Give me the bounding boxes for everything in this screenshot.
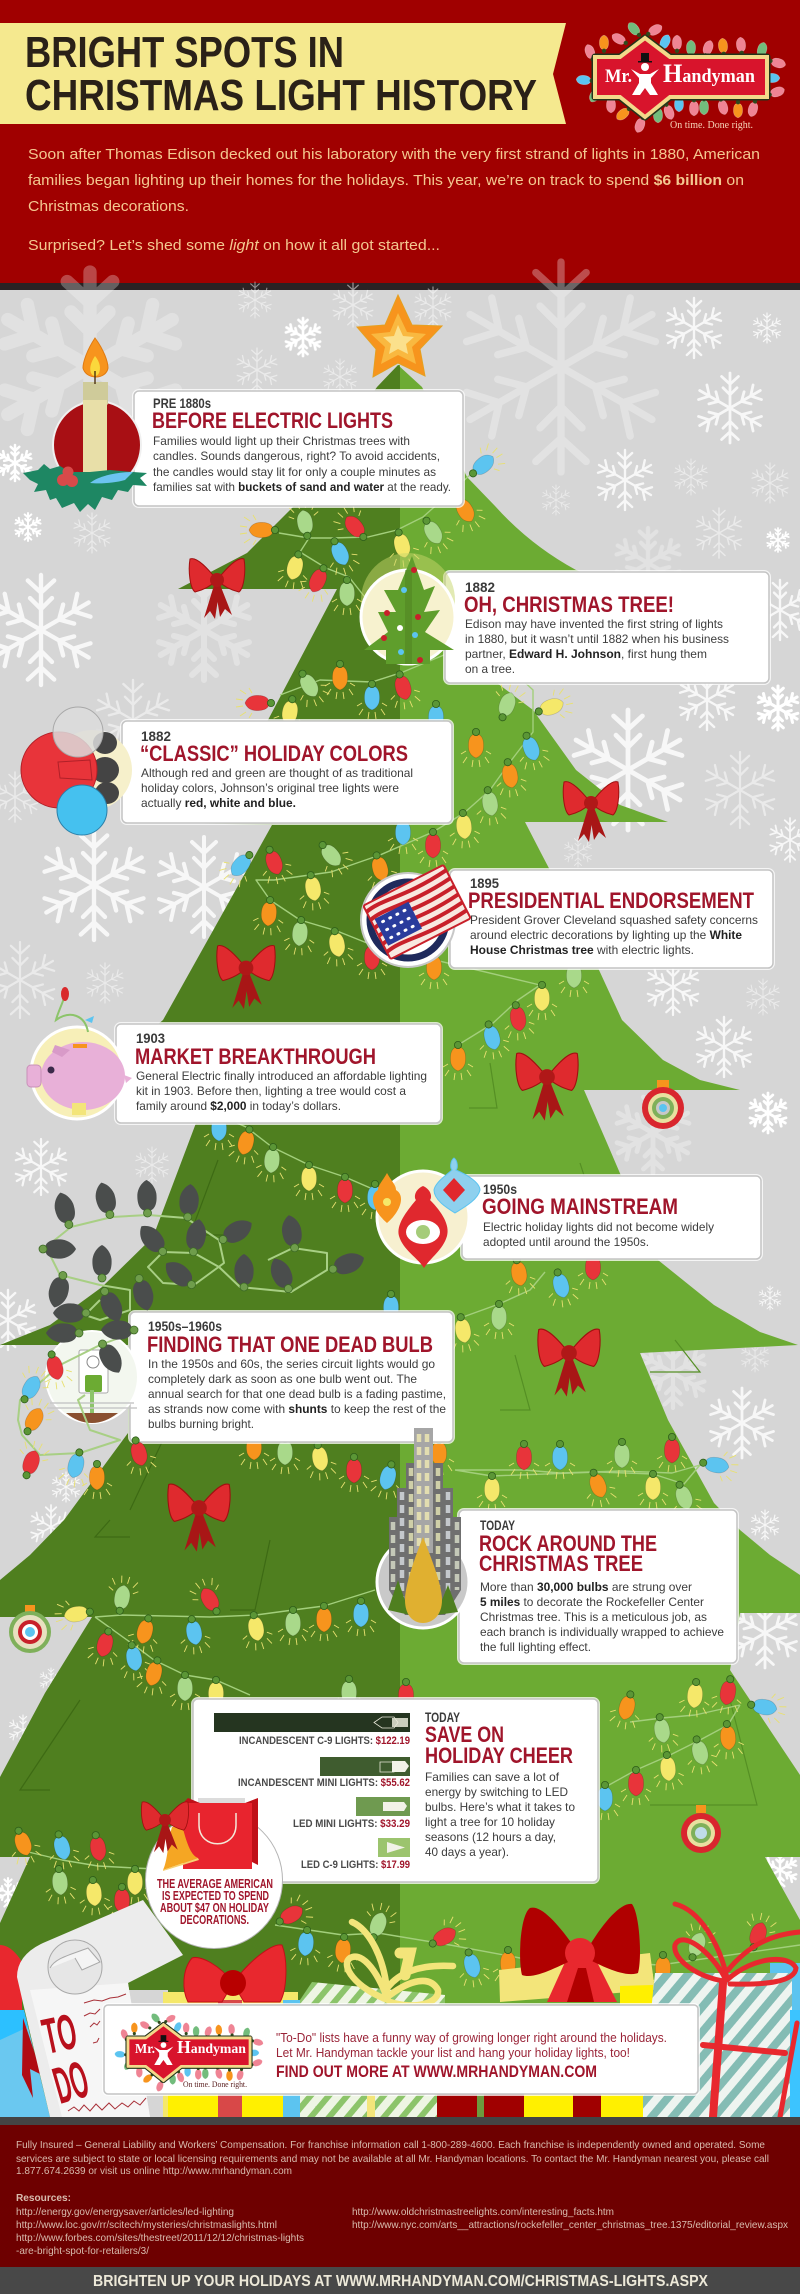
small logo: Mr. [135, 2042, 155, 2057]
card: rock around the christmas tree [459, 1510, 737, 1663]
small logo [114, 2012, 264, 2093]
yellow ribbon [347, 1922, 453, 2117]
icon: piggy bank [27, 987, 132, 1119]
card: classic holiday colors: holiday colors, Johnson’s original tree lights were [141, 782, 399, 795]
card: classic holiday colors: “CLASSIC” HOLIDAY COLORS [140, 741, 408, 766]
resources: http://www.loc.gov/rr/scitech/mysteries/christmaslights.html [16, 2220, 277, 2231]
resources: http://www.forbes.com/sites/thestreet/2011/12/12/christmas-lights [16, 2233, 304, 2244]
card: classic holiday colors: 1882 [141, 728, 171, 744]
card: save on holiday cheer: HOLIDAY CHEER [425, 1743, 573, 1768]
card: finding that one dead bulb [130, 1312, 453, 1442]
red bows [168, 559, 619, 1552]
card: going mainstream: 1950s [483, 1181, 517, 1197]
callout text: ABOUT $47 ON HOLIDAY [160, 1901, 269, 1915]
card: finding that one dead bulb: In the 1950s and 60s, the series circuit lights would go [148, 1358, 435, 1371]
resources: http://www.oldchristmastreelights.com/interesting_facts.htm [352, 2207, 614, 2218]
card: rock around the christmas tree: ROCK AROUND THE [479, 1531, 657, 1556]
icon: retro ornaments [373, 1158, 480, 1268]
card: pre 1880s: PRE 1880s [153, 395, 211, 411]
card: oh christmas tree: Edison may have invented the first string of lights [465, 618, 723, 631]
resources: http://www.nyc.com/arts__attractions/rockefeller_center_christmas_tree.1375/editorial_review.aspx [352, 2220, 789, 2231]
card: oh christmas tree: 1882 [465, 579, 495, 595]
intro text: families began lighting up their homes for the holidays. This year, we’re on track to spend $6 billion on [28, 173, 744, 189]
callout text: IS EXPECTED TO SPEND [162, 1889, 269, 1903]
bar chart: lighting cost: INCANDESCENT MINI LIGHTS: $55.62 [238, 1777, 410, 1789]
card: going mainstream: Electric holiday lights did not become widely [483, 1221, 714, 1234]
bottom call to action bar: BRIGHTEN UP YOUR HOLIDAYS AT WWW.MRHANDYMAN.COM/CHRISTMAS-LIGHTS.ASPX [93, 2273, 708, 2290]
card: rock around the christmas tree: the full lighting effect. [480, 1641, 591, 1654]
title: CHRISTMAS LIGHT HISTORY [25, 71, 537, 120]
card: save on holiday cheer: Families can save a lot of [425, 1771, 560, 1784]
title [25, 28, 537, 120]
left gift bow [184, 1945, 286, 2002]
resources: -are-bright-spot-for-retailers/3/ [16, 2246, 149, 2257]
logo: Handyman [663, 59, 755, 88]
to-do text [38, 2003, 95, 2116]
bulbs upper tree [215, 439, 589, 1080]
call-to-action panel [104, 2005, 698, 2094]
legal text: 1.877.674.2639 or visit us online http://www.mrhandyman.com [16, 2166, 292, 2177]
scroll paper [17, 1900, 183, 2117]
card: save on holiday cheer: TODAY [425, 1709, 460, 1725]
card: presidential endorsement [450, 870, 773, 968]
card: finding that one dead bulb: annual search for that one dead bulb is a fading pastime, [148, 1388, 446, 1401]
card: rock around the christmas tree: More than 30,000 bulbs are strung over [480, 1581, 692, 1594]
card: rock around the christmas tree: 5 miles to decorate the Rockefeller Center [480, 1596, 704, 1609]
card: save on holiday cheer: light a tree for 10 holiday [425, 1816, 555, 1829]
card: finding that one dead bulb: as strands now come with shunts to keep the rest of the [148, 1403, 446, 1416]
card: going mainstream: adopted until around the 1950s. [483, 1236, 649, 1249]
call-to-action text [276, 2030, 667, 2081]
card: going mainstream [462, 1176, 761, 1259]
icon: red white and blue bulbs [21, 707, 132, 835]
small logo: Handyman [177, 2037, 246, 2057]
bulbs middle tree [204, 1111, 740, 1523]
red ribbon [675, 1904, 800, 2117]
card: rock around the christmas tree: Christmas tree. This is a meticulous job, as [480, 1611, 707, 1624]
card: classic holiday colors: Although red and green are thought of as traditional [141, 767, 413, 780]
icon: wall outlet [46, 1331, 138, 1423]
legal text: Fully Insured – General Liability and Workers’ Compensation. For franchise information call 1-800-289-4600. Each franchise is independently owned and operated. Some [16, 2140, 765, 2151]
card: oh christmas tree: OH, CHRISTMAS TREE! [464, 592, 674, 617]
intro text: Christmas decorations. [28, 199, 189, 215]
callout text [157, 1877, 273, 1927]
ornaments [11, 1080, 721, 1853]
logo [576, 20, 787, 134]
string lights on tree [3, 439, 800, 1990]
card: pre 1880s: Families would light up their Christmas trees with [153, 435, 410, 448]
card: market breakthrough: family around $2,000 in today’s dollars. [136, 1100, 341, 1113]
card: presidential endorsement: around electric decorations by lighting up the White [470, 929, 743, 942]
footer rule [0, 2117, 800, 2125]
bulbs lower tree [3, 1573, 788, 1990]
header panel [0, 0, 800, 283]
icon: american flag [361, 865, 471, 967]
legal text: services are subject to state or local licensing requirements and may not be available at all Mr. Handyman locations. To contact the Mr. Handyman nearest you, please call [16, 2154, 769, 2165]
card: pre 1880s [134, 391, 463, 506]
card: market breakthrough [116, 1024, 441, 1123]
card: rock around the christmas tree: CHRISTMAS TREE [479, 1551, 643, 1576]
icon: shopping bag [183, 1798, 258, 1869]
bottom call to action bar [0, 2267, 800, 2294]
card: pre 1880s: the candles would stay lit for only a couple minutes as [153, 466, 436, 479]
card: rock around the christmas tree: each branch is individually wrapped to achieve [480, 1626, 724, 1639]
gift boxes [0, 1904, 800, 2117]
callout text: THE AVERAGE AMERICAN [157, 1877, 273, 1891]
card: pre 1880s: candles. Sounds dangerous, right? To avoid accidents, [153, 450, 440, 463]
icon: candle [23, 338, 147, 512]
big gift bow [520, 1904, 640, 2002]
card: finding that one dead bulb: 1950s–1960s [148, 1318, 222, 1334]
card: market breakthrough: 1903 [136, 1030, 165, 1046]
call-to-action text: FIND OUT MORE AT WWW.MRHANDYMAN.COM [276, 2063, 597, 2081]
card: save on holiday cheer: bulbs. Here’s what it takes to [425, 1801, 575, 1814]
scroll curl [48, 1940, 102, 1994]
card: save on holiday cheer: SAVE ON [425, 1722, 504, 1747]
card: save on holiday cheer: seasons (12 hours a day, [425, 1831, 556, 1844]
callout: average american spending [141, 1798, 282, 1948]
bar chart: lighting cost: LED MINI LIGHTS: $33.29 [293, 1818, 410, 1830]
bar chart: lighting cost [214, 1713, 410, 1871]
card: presidential endorsement: President Grover Cleveland squashed safety concerns [470, 914, 758, 927]
resources: http://energy.gov/energysaver/articles/led-lighting [16, 2207, 234, 2218]
icon: bell and bow [141, 1802, 199, 1871]
card: finding that one dead bulb: completely dark as soon as one bulb went out. The [148, 1373, 417, 1386]
card: market breakthrough: MARKET BREAKTHROUGH [135, 1044, 376, 1069]
intro text [28, 147, 760, 254]
card: pre 1880s: families sat with buckets of sand and water at the ready. [153, 481, 451, 494]
call-to-action text: Let Mr. Handyman tackle your list and hang your holiday lights, too! [276, 2045, 630, 2060]
legal text [16, 2140, 769, 2177]
card: classic holiday colors [122, 721, 452, 823]
logo: On time. Done right. [670, 120, 753, 131]
to-do text: TO [38, 2003, 82, 2065]
title: BRIGHT SPOTS IN [25, 28, 344, 77]
intro text: Surprised? Let’s shed some light on how it all got started... [28, 238, 440, 254]
resources: Resources: [16, 2193, 71, 2204]
to-do scroll [17, 1900, 183, 2117]
card: presidential endorsement: 1895 [470, 875, 499, 891]
card: oh christmas tree: partner, Edward H. Johnson , first hung them [465, 648, 707, 661]
card: rock around the christmas tree: TODAY [480, 1517, 515, 1533]
logo: Mr. [605, 66, 632, 87]
intro text: Soon after Thomas Edison decked out his laboratory with the very first strand of lights in 1880, American [28, 147, 760, 163]
scroll squiggles [68, 1994, 146, 2111]
footer panel [0, 2125, 800, 2267]
title banner [0, 23, 566, 124]
card: pre 1880s: BEFORE ELECTRIC LIGHTS [152, 408, 393, 433]
icon: mini christmas tree [361, 553, 455, 664]
card: presidential endorsement: PRESIDENTIAL ENDORSEMENT [468, 888, 754, 913]
card: market breakthrough: kit in 1903. Before then, lighting a tree would cost a [136, 1085, 407, 1098]
christmas tree [0, 365, 800, 2117]
card: save on holiday cheer [193, 1699, 598, 1882]
card: presidential endorsement: House Christmas tree with electric lights. [470, 944, 694, 957]
header bottom rule [0, 283, 800, 290]
card: oh christmas tree: in 1880, but it wasn’t until 1882 when his business [465, 633, 729, 646]
card: finding that one dead bulb: bulbs burning bright. [148, 1418, 254, 1431]
card: save on holiday cheer: 40 days a year). [425, 1846, 509, 1859]
card: classic holiday colors: actually red, white and blue. [141, 797, 296, 810]
icon: rockefeller center tree [377, 1428, 469, 1628]
card: save on holiday cheer: energy by switching to LED [425, 1786, 568, 1799]
small logo: On time. Done right. [183, 2080, 247, 2089]
callout text: DECORATIONS. [180, 1913, 249, 1927]
card: market breakthrough: General Electric finally introduced an affordable lighting [136, 1070, 427, 1083]
call-to-action text: "To-Do" lists have a funny way of growing longer right around the holidays. [276, 2030, 667, 2045]
dead bulb strand [10, 1180, 367, 1499]
icon: star tree topper [357, 295, 442, 377]
card: oh christmas tree: on a tree. [465, 663, 515, 676]
bar chart: lighting cost: LED C-9 LIGHTS: $17.99 [301, 1859, 410, 1871]
resources [16, 2193, 789, 2257]
card: going mainstream: GOING MAINSTREAM [482, 1194, 678, 1219]
to-do text: DO [47, 2051, 95, 2116]
bar chart: lighting cost: INCANDESCENT C-9 LIGHTS: $122.19 [239, 1735, 410, 1747]
card: oh christmas tree [445, 572, 769, 683]
card: finding that one dead bulb: FINDING THAT ONE DEAD BULB [147, 1332, 433, 1357]
